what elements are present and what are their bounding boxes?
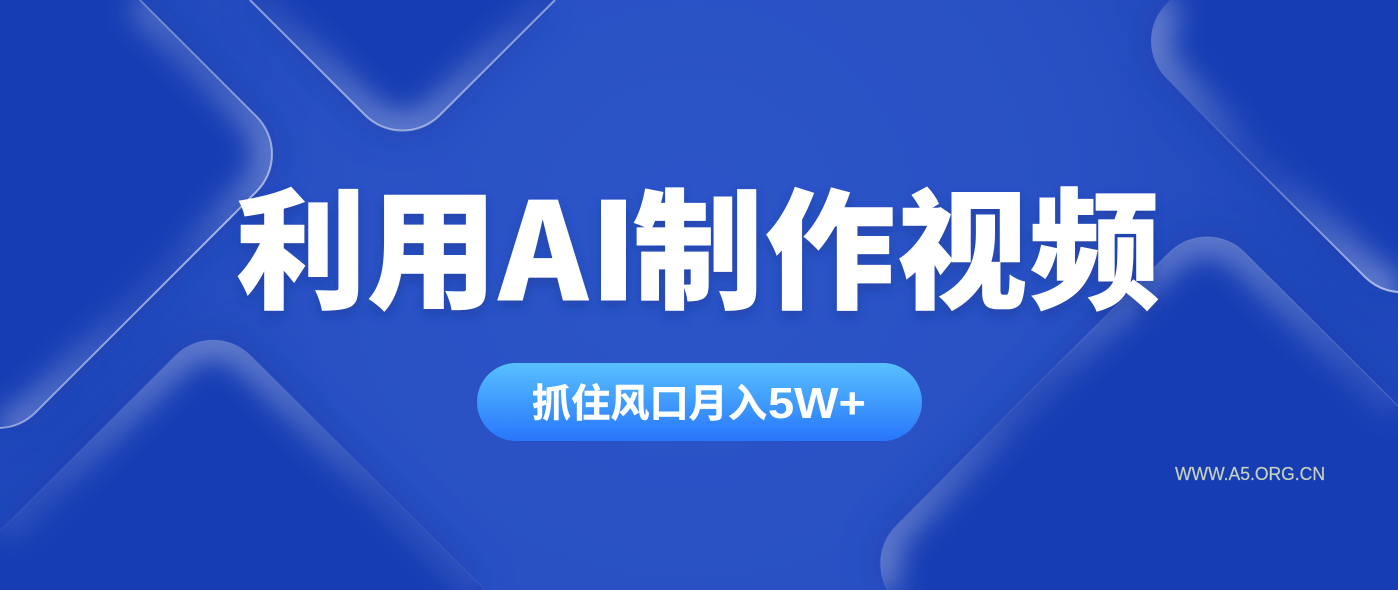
- title: 利用: [236, 148, 497, 336]
- subtitle text: 抓住风口月入: [532, 383, 767, 426]
- watermark: WWW.A5.ORG.CN: [1175, 464, 1325, 484]
- title: 制作视频: [633, 148, 1160, 336]
- subtitle text: 5W+: [768, 379, 866, 428]
- title: AI: [497, 145, 637, 339]
- shape: top-right rounded diamond: [1151, 0, 1398, 292]
- shape: bottom-left rounded diamond: [0, 340, 485, 590]
- shape: top rounded diamond: [250, 0, 555, 131]
- shape: bottom-right rounded diamond: [880, 237, 1398, 590]
- subtitle pill: [477, 363, 922, 441]
- shape: left rounded diamond: [0, 0, 272, 428]
